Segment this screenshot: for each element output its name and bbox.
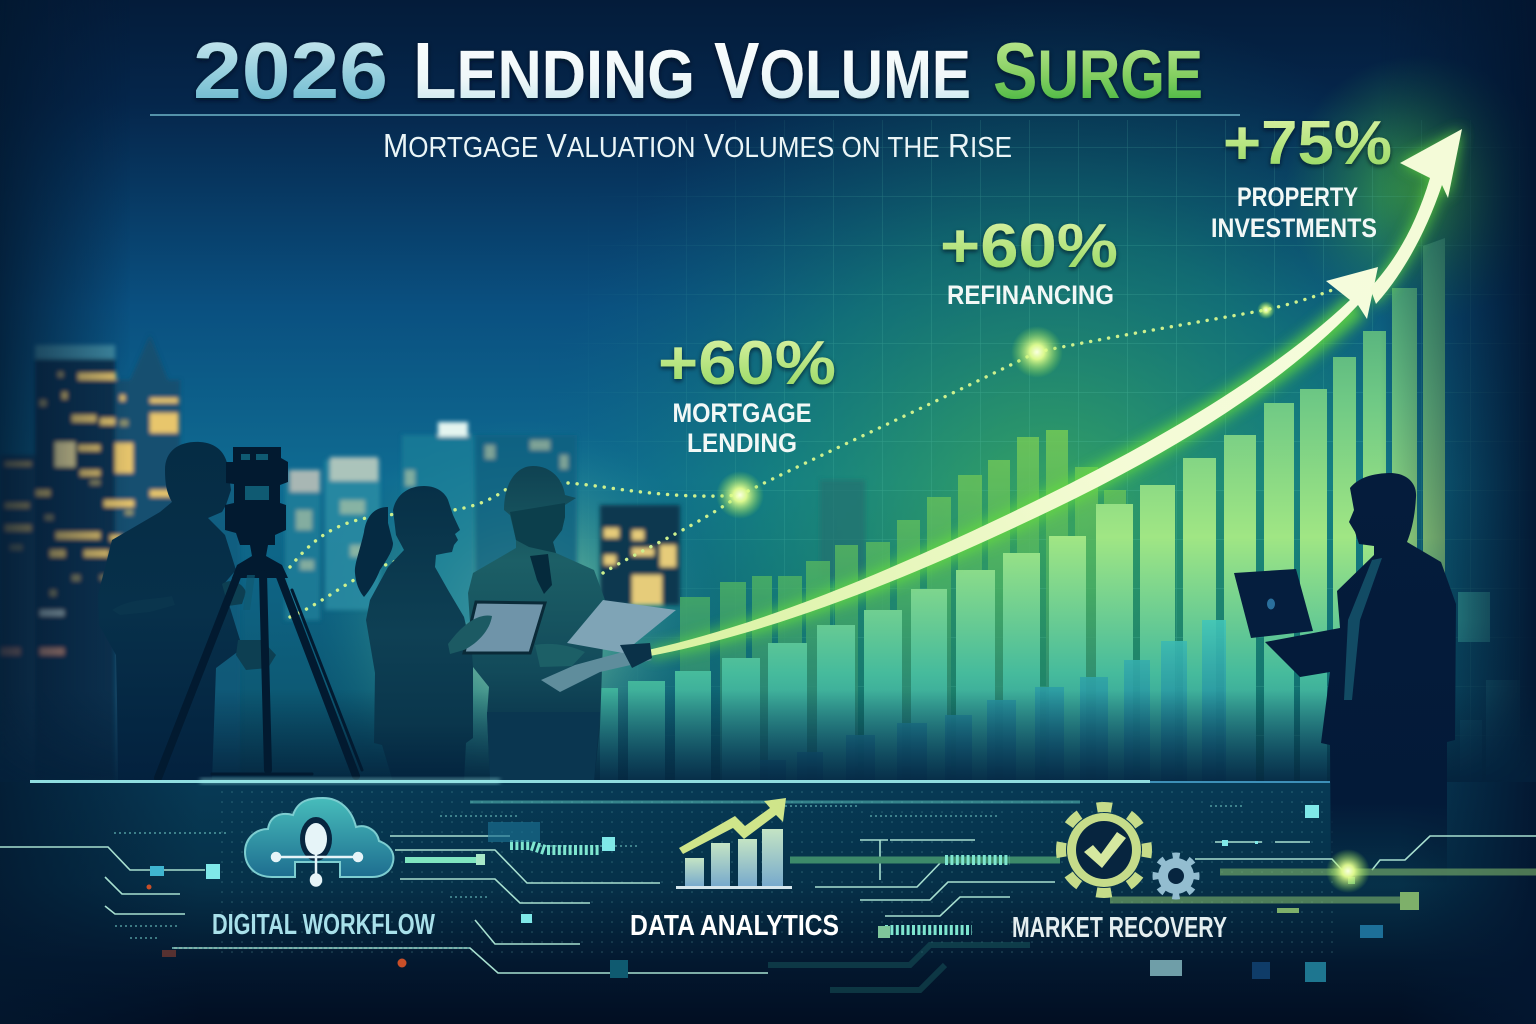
city skyline at dusk: [0, 335, 865, 780]
label: data analytics: DATA ANALYTICS: [630, 910, 839, 942]
title: SURGE: [993, 26, 1203, 115]
title divider: [150, 114, 1240, 116]
stat: +75% property investments: INVESTMENTS: [1211, 213, 1377, 243]
front row of chart bars: [600, 238, 1445, 782]
icon: rising bar chart: [676, 798, 792, 889]
title: [193, 26, 1203, 115]
tablet held by woman: [448, 602, 545, 654]
stat: +60% refinancing: REFINANCING: [947, 280, 1114, 310]
stat: +60% mortgage lending: [658, 329, 836, 458]
circuit traces: [0, 802, 1536, 990]
growth arrow: [648, 129, 1462, 658]
title: 2026: [193, 26, 388, 115]
icon: gear with check: [1061, 807, 1147, 893]
label: digital workflow: DIGITAL WORKFLOW: [212, 909, 435, 941]
stat: +75% property investments: +75%: [1223, 109, 1392, 178]
silhouette: surveyor with theodolite: [98, 442, 362, 782]
stat: +60% refinancing: [940, 212, 1118, 310]
node: mortgage lending: [716, 471, 764, 519]
icon: small gear: [1156, 856, 1196, 896]
subtitle: MORTGAGE VALUATION VOLUMES ON THE RISE: [383, 127, 1012, 164]
title: VOLUME: [714, 26, 971, 115]
horizon line: [30, 778, 1330, 784]
laptop: [1234, 569, 1313, 638]
dotted growth lines with nodes: [290, 285, 1345, 617]
stat: +60% mortgage lending: MORTGAGE: [672, 398, 812, 428]
icon: cloud workflow: [245, 798, 393, 886]
node: refinancing: [1011, 326, 1063, 378]
surveyor hands: [222, 581, 276, 670]
silhouette: businessman with laptop: [1234, 473, 1456, 885]
overlay fades at edges: [0, 0, 1536, 800]
stat: +60% refinancing: +60%: [940, 212, 1118, 281]
background gradient and glows: [0, 0, 1530, 781]
title: LENDING: [413, 26, 695, 115]
silhouette: engineer in hard hat: [468, 466, 605, 782]
stat: +75% property investments: PROPERTY: [1237, 182, 1358, 212]
stat: +75% property investments: [1211, 109, 1392, 243]
plans held by engineer: [535, 600, 676, 692]
silhouette: woman: [355, 486, 473, 782]
node: property: [1257, 301, 1275, 319]
label: market recovery: MARKET RECOVERY: [1012, 912, 1227, 944]
theodolite head: [225, 447, 288, 578]
back row of chart bars: [680, 430, 1126, 782]
footer panel: [0, 782, 1536, 1024]
low foreground bars: [760, 592, 1520, 782]
stat: +60% mortgage lending: LENDING: [687, 428, 797, 458]
stat: +60% mortgage lending: +60%: [658, 329, 836, 398]
tripod legs: [158, 574, 362, 778]
